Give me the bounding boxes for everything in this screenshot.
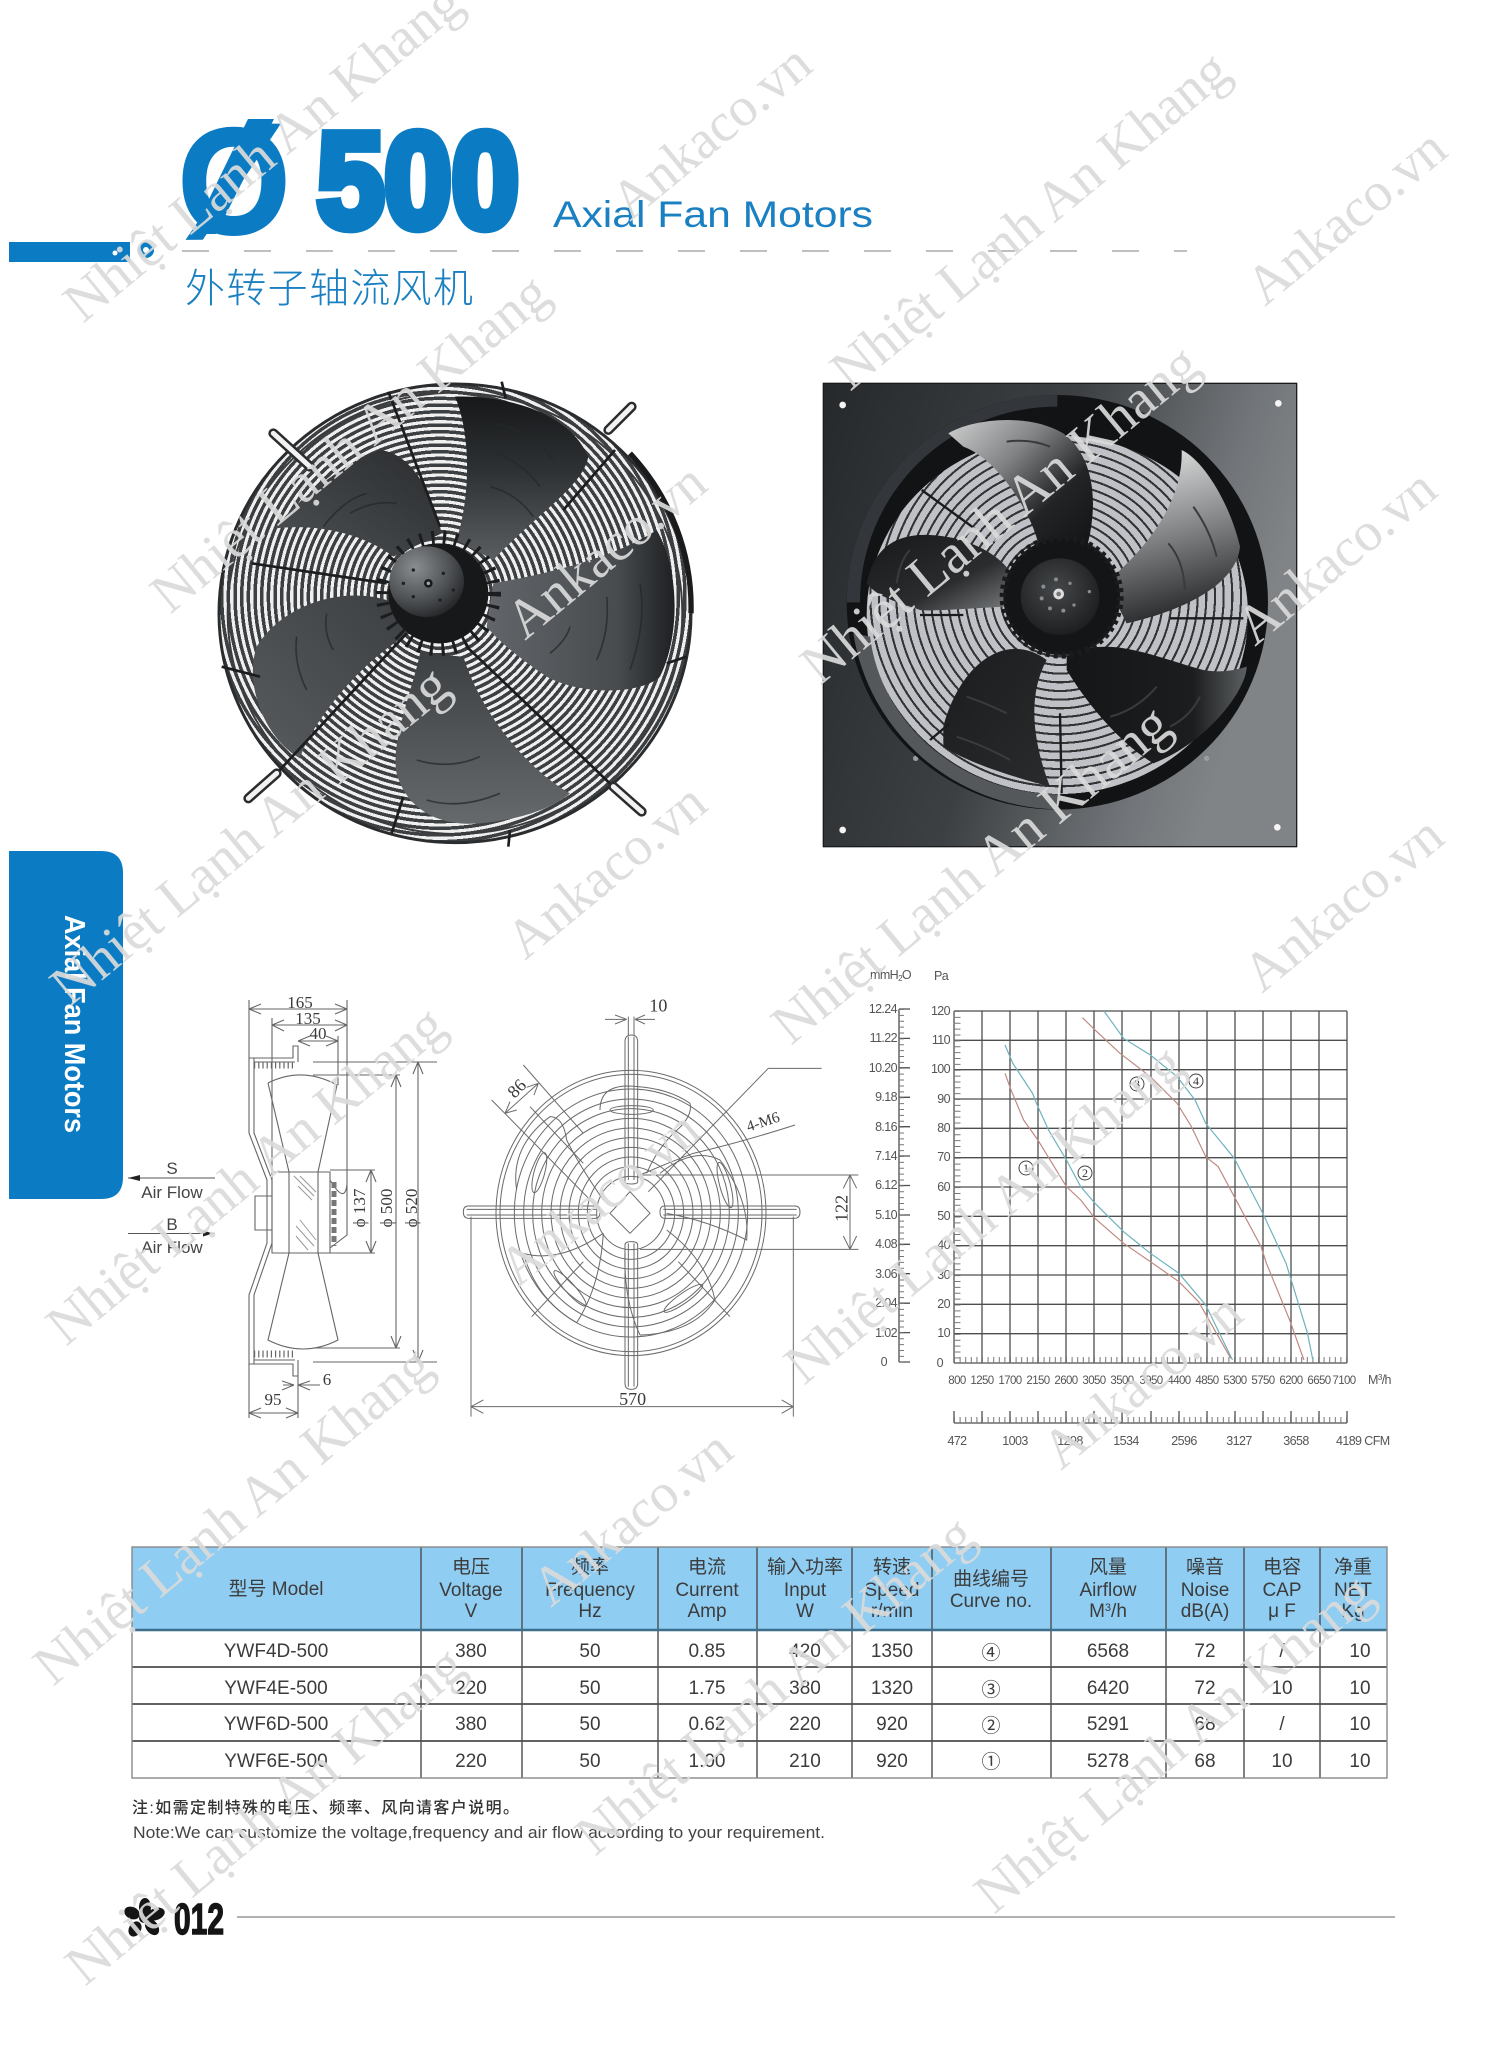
watermarks: Nhiệt Lạnh An Khang — [39, 654, 461, 1017]
table header text: 净重 — [1334, 1556, 1372, 1578]
table rows: 1350 — [871, 1641, 913, 1662]
front view labels: 86 — [503, 1075, 530, 1102]
dimension values: ϕ 520 — [402, 1189, 421, 1227]
table rows: 420 — [789, 1641, 821, 1662]
axis labels: 3.06 — [875, 1267, 898, 1281]
table rows: 10 — [1271, 1751, 1293, 1772]
axis labels: 11.22 — [870, 1031, 898, 1045]
performance curve chart — [869, 968, 1392, 1448]
subtitle chinese: 外转子轴流风机 — [185, 267, 473, 311]
curve number badges — [1019, 1074, 1203, 1180]
axis labels: 90 — [937, 1092, 951, 1106]
axis labels: mmH — [870, 968, 898, 982]
table rows: 5291 — [1087, 1714, 1129, 1735]
table header text: μ F — [1268, 1601, 1296, 1622]
table rows: 380 — [789, 1678, 821, 1699]
axis labels: 10.20 — [869, 1061, 898, 1075]
air flow labels: Air Flow — [141, 1183, 203, 1202]
dimension values: 40 — [310, 1024, 326, 1043]
front view labels: 122 — [831, 1195, 851, 1222]
axis labels: 50 — [937, 1209, 951, 1223]
axis labels: 3127 — [1226, 1434, 1252, 1448]
table rows: 10 — [1349, 1751, 1371, 1772]
watermarks: Nhiệt Lạnh An Khang — [963, 1562, 1385, 1925]
axis labels: 4850 — [1195, 1375, 1219, 1387]
photo: round fan with guard — [219, 382, 691, 847]
axis labels: 472 — [947, 1434, 967, 1448]
watermarks: Ankaco.vn — [1224, 457, 1448, 656]
axis labels: 3950 — [1139, 1375, 1163, 1387]
axis labels: 3658 — [1283, 1434, 1309, 1448]
axis labels: O — [902, 968, 912, 982]
axis labels: 100 — [931, 1062, 951, 1076]
table rows: 68 — [1194, 1751, 1216, 1772]
note chinese: 注:如需定制特殊的电压、频率、风向请客户说明。 — [132, 1798, 519, 1817]
axis labels: 10 — [937, 1326, 951, 1340]
table rows: 220 — [789, 1714, 821, 1735]
table header text: Input — [784, 1580, 827, 1601]
axis labels: 2.04 — [875, 1296, 898, 1310]
table rows: 72 — [1194, 1641, 1216, 1662]
front view labels: 570 — [619, 1389, 646, 1409]
axis labels: 6.12 — [875, 1178, 898, 1192]
table header text: W — [796, 1601, 814, 1622]
table rows: 220 — [455, 1678, 487, 1699]
axis labels: 3500 — [1110, 1375, 1134, 1387]
watermarks: Nhiệt Lạnh An Khang — [819, 39, 1241, 402]
title: 500: 500 — [317, 105, 519, 256]
table rows: 0.85 — [689, 1641, 725, 1662]
axis labels: 1250 — [970, 1375, 994, 1387]
table header text: 噪音 — [1186, 1556, 1224, 1578]
page number: 012 — [174, 1895, 224, 1944]
specification table — [132, 1547, 1387, 1778]
table rows: 210 — [789, 1751, 821, 1772]
watermarks: Ankaco.vn — [494, 771, 718, 970]
table rows: 10 — [1349, 1641, 1371, 1662]
axis labels — [869, 968, 1392, 1448]
blue header bar — [9, 242, 1187, 262]
table header text: 曲线编号 — [953, 1568, 1029, 1590]
dimension values: 165 — [287, 993, 313, 1012]
axis labels: 6650 — [1307, 1375, 1331, 1387]
table header text: Hz — [578, 1601, 602, 1622]
table rows: 920 — [876, 1714, 908, 1735]
note english: Note:We can customize the voltage,frequency and air flow according to your requirement. — [133, 1823, 825, 1842]
watermarks: Nhiệt Lạnh An Khang — [760, 693, 1182, 1056]
table rows: 10 — [1349, 1678, 1371, 1699]
table rows: / — [1279, 1641, 1285, 1662]
table rows: 50 — [579, 1678, 601, 1699]
watermarks: Nhiệt Lạnh An Khang — [789, 333, 1211, 696]
axis labels: 20 — [937, 1297, 951, 1311]
axis labels: /h — [1382, 1373, 1392, 1387]
watermarks: Nhiệt Lạnh An Khang — [139, 262, 561, 625]
table rows — [224, 1641, 1371, 1773]
front view dimension drawing — [463, 996, 858, 1417]
axis labels: 30 — [937, 1268, 951, 1282]
axis labels: 60 — [937, 1180, 951, 1194]
watermarks: Nhiệt Lạnh An Khang — [773, 1033, 1195, 1396]
watermarks: Ankaco.vn — [494, 451, 718, 650]
air flow labels — [128, 1159, 215, 1257]
dimension values: 6 — [323, 1370, 331, 1389]
table rows: ① — [981, 1751, 1001, 1773]
axis labels: 1298 — [1057, 1434, 1083, 1448]
table header text: Voltage — [439, 1580, 503, 1601]
sidebar text: Axial Fan Motors — [58, 915, 90, 1133]
sidebar tab — [9, 851, 123, 1199]
axis labels: 3050 — [1082, 1375, 1106, 1387]
axis labels: 5750 — [1251, 1375, 1275, 1387]
table rows: 5278 — [1087, 1751, 1129, 1772]
side view dimension drawing — [128, 993, 437, 1418]
watermarks: Nhiệt Lạnh An Khang — [35, 994, 457, 1357]
axis labels: 7100 — [1332, 1375, 1356, 1387]
dimension values: 135 — [295, 1009, 321, 1028]
table header text: r/min — [871, 1601, 913, 1622]
axis labels: 2600 — [1054, 1375, 1078, 1387]
curve number badges: 4 — [1193, 1074, 1199, 1088]
table rows: / — [1279, 1714, 1285, 1735]
table header text: Speed — [865, 1580, 919, 1601]
watermarks: Ankaco.vn — [599, 32, 823, 231]
watermarks: Ankaco.vn — [520, 1418, 744, 1617]
table header text: Kg — [1341, 1601, 1365, 1622]
table rows: YWF6E-500 — [224, 1751, 328, 1772]
axis labels: 4400 — [1167, 1375, 1191, 1387]
table header text: 输入功率 — [767, 1556, 843, 1578]
table header text: Curve no. — [950, 1591, 1032, 1612]
table rows: 50 — [579, 1751, 601, 1772]
axis labels: 4189 CFM — [1336, 1434, 1390, 1448]
curve number badges: 2 — [1082, 1166, 1088, 1180]
table rows: 380 — [455, 1641, 487, 1662]
table rows: ② — [981, 1715, 1001, 1737]
watermarks: Nhiệt Lạnh An Khang — [54, 1634, 476, 1997]
front view labels: 4-M6 — [744, 1109, 782, 1135]
table header text — [228, 1556, 1372, 1622]
table rows: 68 — [1194, 1714, 1216, 1735]
table rows: 220 — [455, 1751, 487, 1772]
axis labels: 120 — [931, 1004, 951, 1018]
front view labels — [503, 996, 851, 1409]
table header text: dB(A) — [1181, 1601, 1229, 1622]
table rows: ④ — [981, 1642, 1001, 1664]
dimension values: ϕ 137 — [350, 1188, 369, 1227]
table rows: 10 — [1271, 1678, 1293, 1699]
table header text: M — [1089, 1601, 1105, 1622]
axis labels: 1003 — [1002, 1434, 1028, 1448]
table rows: 50 — [579, 1641, 601, 1662]
subtitle english: Axial Fan Motors — [553, 194, 873, 235]
table header text: 3 — [1105, 1602, 1111, 1614]
axis labels: 5300 — [1223, 1375, 1247, 1387]
table header text: Frequency — [545, 1580, 635, 1601]
axis labels: 110 — [932, 1033, 951, 1047]
air flow labels: S — [166, 1159, 178, 1178]
table rows: 6420 — [1087, 1678, 1129, 1699]
axis labels: 0 — [881, 1355, 888, 1369]
table rows: YWF4E-500 — [224, 1678, 328, 1699]
table header text: 转速 — [873, 1556, 911, 1578]
axis labels: 12.24 — [869, 1002, 898, 1016]
table rows: 72 — [1194, 1678, 1216, 1699]
axis labels: M — [1368, 1373, 1378, 1387]
axis labels: 0 — [937, 1356, 944, 1370]
axis labels: 1700 — [998, 1375, 1022, 1387]
chart grid — [899, 1009, 1347, 1423]
table header text: CAP — [1262, 1580, 1302, 1601]
table rows: 6568 — [1087, 1641, 1129, 1662]
table header text: /h — [1111, 1601, 1127, 1622]
dimension values — [264, 993, 421, 1409]
axis labels: 80 — [937, 1121, 951, 1135]
watermarks: Ankaco.vn — [1234, 117, 1458, 316]
axis labels: 8.16 — [875, 1120, 898, 1134]
watermarks: Nhiệt Lạnh An Khang — [22, 1334, 444, 1697]
table rows: YWF6D-500 — [224, 1714, 328, 1735]
axis labels: 40 — [937, 1238, 951, 1252]
table header text: 风量 — [1089, 1557, 1127, 1578]
axis labels: 5.10 — [875, 1208, 898, 1222]
table rows: 10 — [1349, 1714, 1371, 1735]
table rows: 1.00 — [689, 1751, 725, 1772]
footer — [122, 1895, 1395, 1944]
fan curves — [1005, 1011, 1313, 1360]
table header text: NET — [1334, 1580, 1372, 1601]
watermarks: Ankaco.vn — [1231, 804, 1455, 1003]
table header text: Amp — [687, 1601, 727, 1622]
icon: fan logo — [122, 1898, 167, 1939]
table header text: 电压 — [452, 1556, 490, 1578]
axis labels: 4.08 — [875, 1237, 898, 1251]
axis labels: 1534 — [1113, 1434, 1139, 1448]
table header background — [132, 1547, 1387, 1630]
table header text: 电流 — [688, 1556, 726, 1578]
photo: square panel fan — [823, 383, 1297, 847]
axis labels: 2596 — [1171, 1434, 1197, 1448]
title block — [9, 97, 1187, 311]
table header text: Noise — [1181, 1580, 1229, 1601]
axis labels: 70 — [937, 1150, 951, 1164]
axis labels: 1.02 — [875, 1326, 898, 1340]
watermarks: Ankaco.vn — [487, 1098, 711, 1297]
table lines — [132, 1547, 1387, 1778]
table rows: 380 — [455, 1714, 487, 1735]
table header text: 频率 — [571, 1556, 609, 1578]
table header text: Current — [675, 1580, 739, 1601]
air flow labels: Air Flow — [141, 1238, 203, 1257]
axis labels: 3 — [1378, 1373, 1383, 1382]
table rows: 920 — [876, 1751, 908, 1772]
air flow labels: B — [166, 1215, 178, 1234]
dimension values: 95 — [264, 1390, 282, 1409]
title: diameter symbol: Ø — [178, 97, 290, 265]
axis labels: 6200 — [1279, 1375, 1303, 1387]
curve number badges: 3 — [1134, 1077, 1140, 1091]
table header text: V — [465, 1601, 478, 1622]
table header text: Airflow — [1079, 1580, 1137, 1601]
axis labels: 2150 — [1026, 1375, 1050, 1387]
watermarks: Nhiệt Lạnh An Khang — [564, 1504, 986, 1867]
axis labels: 7.14 — [875, 1149, 898, 1163]
dimension values: ϕ 500 — [377, 1189, 396, 1227]
table header text: 电容 — [1263, 1556, 1301, 1578]
table rows: YWF4D-500 — [224, 1641, 328, 1662]
table rows: 50 — [579, 1714, 601, 1735]
table rows: 1.75 — [689, 1678, 725, 1699]
axis labels: Pa — [934, 969, 949, 983]
axis labels: 800 — [948, 1375, 966, 1387]
table rows: ③ — [981, 1679, 1001, 1701]
front view labels: 10 — [649, 996, 667, 1016]
watermarks: Ankaco.vn — [1030, 1281, 1254, 1480]
axis labels: 2 — [898, 974, 903, 983]
table header text: 型号 Model — [228, 1578, 324, 1600]
curve number badges: 1 — [1023, 1161, 1029, 1175]
table rows: 0.62 — [689, 1714, 725, 1735]
axis labels: 9.18 — [875, 1090, 898, 1104]
table rows: 1320 — [871, 1678, 913, 1699]
